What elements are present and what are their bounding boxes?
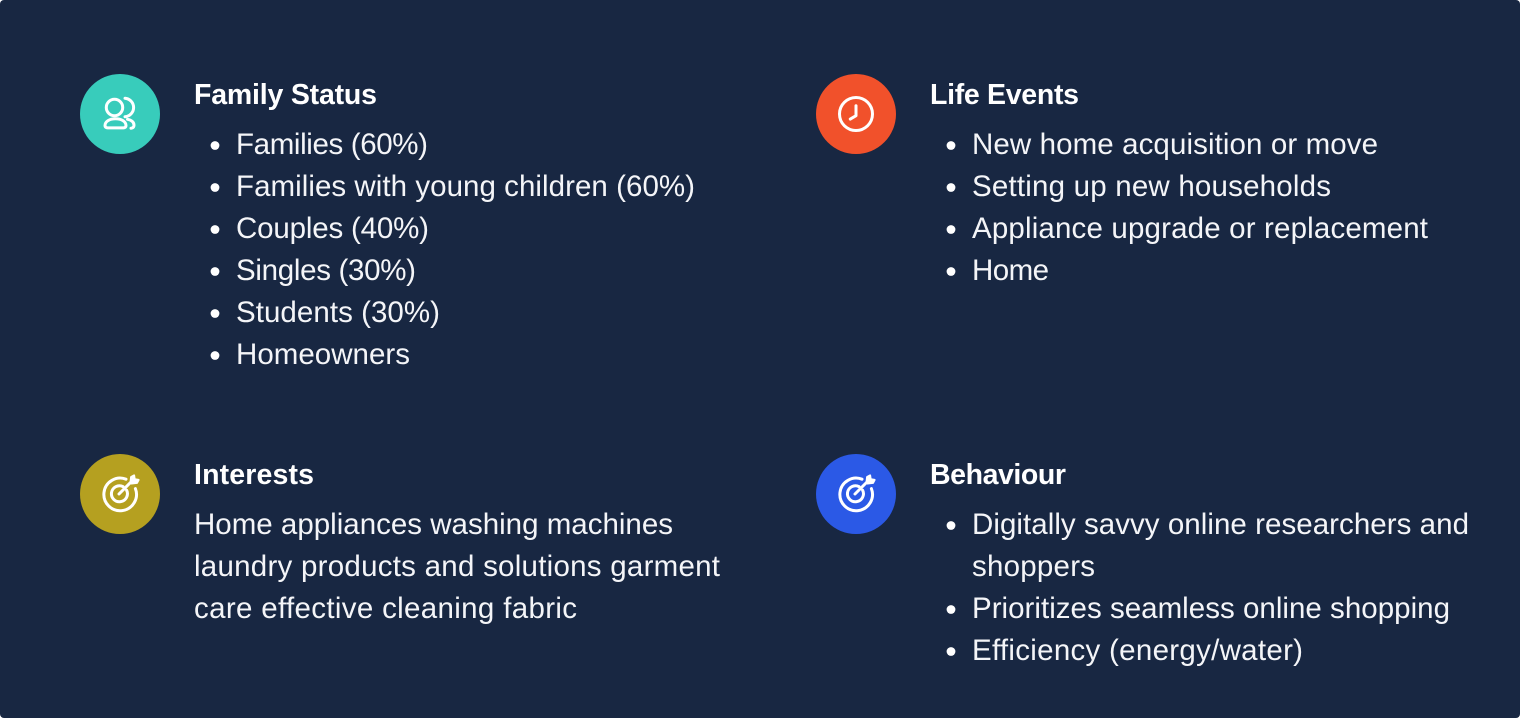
heading: Behaviour: Behaviour bbox=[930, 459, 1066, 491]
heading: Interests: Interests bbox=[194, 459, 314, 491]
list: life events items: Setting up new households bbox=[972, 170, 1331, 203]
heading: Family Status: Family Status bbox=[194, 79, 377, 111]
text block: interests description: laundry products and solutions garment bbox=[194, 550, 720, 583]
list: family status items bbox=[211, 128, 695, 371]
list: behaviour items: Efficiency (energy/water) bbox=[972, 634, 1303, 667]
icon: target bbox=[80, 454, 160, 534]
list: life events items: Home bbox=[972, 254, 1049, 287]
list: family status items: Homeowners bbox=[236, 338, 410, 371]
list: behaviour items: shoppers bbox=[972, 550, 1095, 583]
list: behaviour items: Prioritizes seamless online shopping bbox=[972, 592, 1450, 625]
list: family status items: Singles (30%) bbox=[236, 254, 416, 287]
panel: behaviour bbox=[816, 454, 1469, 667]
list: life events items: Appliance upgrade or replacement bbox=[972, 212, 1428, 245]
text block: interests description: care effective cleaning fabric bbox=[194, 592, 577, 625]
list: family status items: Families (60%) bbox=[236, 128, 428, 161]
list: behaviour items: Digitally savvy online researchers and bbox=[972, 508, 1469, 541]
heading: Life Events: Life Events bbox=[930, 79, 1079, 111]
list: behaviour items bbox=[947, 508, 1469, 667]
list: life events items bbox=[947, 128, 1428, 287]
icon: clock bbox=[816, 74, 896, 154]
panel: interests bbox=[80, 454, 720, 625]
panel: life events bbox=[816, 74, 1428, 287]
panel: family status bbox=[80, 74, 695, 371]
text block: interests description: Home appliances washing machines bbox=[194, 508, 673, 541]
text block: interests description bbox=[194, 508, 720, 625]
list: family status items: Students (30%) bbox=[236, 296, 440, 329]
list: family status items: Families with young children (60%) bbox=[236, 170, 695, 203]
list: life events items: New home acquisition or move bbox=[972, 128, 1378, 161]
icon: people bbox=[80, 74, 160, 154]
list: family status items: Couples (40%) bbox=[236, 212, 429, 245]
icon: target bbox=[816, 454, 896, 534]
